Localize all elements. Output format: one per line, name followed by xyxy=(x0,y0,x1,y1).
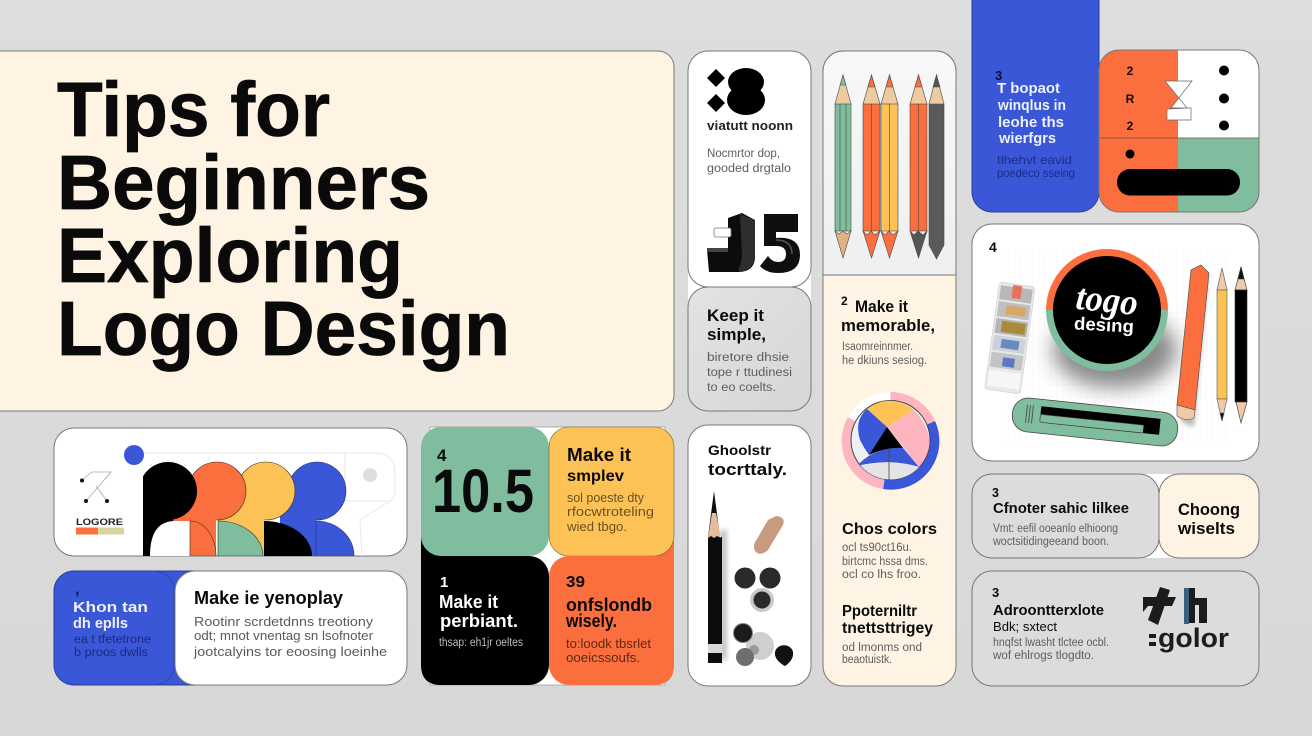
tile: yellow tip: Make it xyxy=(567,445,631,465)
body text xyxy=(842,542,928,581)
blue tip body: ea t tfetetrone xyxy=(74,634,151,646)
panel: four colour tiles xyxy=(421,427,674,685)
blue tip body xyxy=(74,634,151,659)
heading: Bdk; sxtect xyxy=(993,619,1057,634)
caption: viatutt noonn xyxy=(707,118,793,133)
orange pencil two xyxy=(910,75,927,258)
tile: green number: 4 xyxy=(437,446,447,465)
cream tip card xyxy=(1159,474,1259,558)
heading: make it memorable: memorable, xyxy=(841,317,935,335)
blue tip heading xyxy=(73,600,148,632)
panel: paired tip row xyxy=(972,474,1259,558)
heading: strategy: Ppoterniltr xyxy=(842,603,917,620)
body text: he dkiuns sesiog. xyxy=(842,355,927,367)
circular logo badge: togo xyxy=(1074,277,1140,324)
circular logo badge xyxy=(1046,249,1168,371)
panel: keep it simple xyxy=(688,287,811,411)
panel: pencils and make it memorable xyxy=(823,51,956,686)
heading: Adroontterxlote xyxy=(993,603,1104,619)
title: Tips for xyxy=(57,67,330,153)
heading: make it memorable: 2 xyxy=(841,294,848,308)
numbers column: R xyxy=(1126,92,1135,106)
blue tip heading: dh eplls xyxy=(73,616,128,632)
body text xyxy=(992,637,1109,662)
body text xyxy=(193,614,387,659)
numbers column: 2 xyxy=(1127,119,1134,133)
black pill xyxy=(1117,169,1240,196)
heading: strategy xyxy=(842,603,933,637)
panel: blue tip xyxy=(54,571,214,685)
body text: tlhehvt eavid xyxy=(997,153,1072,167)
body text: birtcmc hssa dms. xyxy=(842,556,928,568)
body text: biretore dhsie xyxy=(707,352,789,364)
panel: blue top card: 3 xyxy=(995,68,1002,83)
numbers column: 2 xyxy=(1127,64,1134,78)
icon: black and silver buttons xyxy=(734,568,793,666)
green pencil xyxy=(835,75,851,258)
heading: Keep it xyxy=(707,307,765,325)
body text: ocl co lhs froo. xyxy=(842,569,921,581)
colour wheel chart xyxy=(842,392,939,490)
heading: Ghoolstr xyxy=(708,442,772,458)
yellow pencil xyxy=(1217,268,1227,421)
panel: blue top card xyxy=(972,0,1099,212)
panel: tools card xyxy=(688,425,811,686)
heading: choose colors: Chos colors xyxy=(842,521,937,538)
heading: simple, xyxy=(707,326,766,344)
tile: black tip: thsap: eh1jr oeltes xyxy=(439,637,523,649)
title: Logo Design xyxy=(57,286,510,372)
body text: odt; mnot vnentag sn lsofnoter xyxy=(194,628,374,643)
icon: hourglass xyxy=(1165,81,1192,120)
tile: orange tip: wisely. xyxy=(565,611,617,631)
title: Exploring xyxy=(57,213,403,299)
body text: Nocmrtor dop, xyxy=(707,148,780,160)
blue tip heading: Khon tan xyxy=(73,600,148,616)
body text xyxy=(707,352,792,394)
grey tip card: woctsitidingeeand boon. xyxy=(992,536,1109,548)
tile: orange tip: ooeicssoufs. xyxy=(566,651,640,665)
blue tip body: b proos dwlls xyxy=(74,647,148,659)
circular logo badge: desing xyxy=(1074,313,1134,337)
heading: make it memorable: Make it xyxy=(855,298,908,316)
icon: pencils xyxy=(835,75,944,259)
heading: tocrttaly. xyxy=(708,460,787,479)
grey tip card: 3 xyxy=(992,486,999,500)
tile: black tip xyxy=(421,556,549,685)
body text xyxy=(842,341,927,367)
panel: blue tip: , xyxy=(75,581,79,598)
panel: colour logo tip xyxy=(972,571,1259,686)
tile: orange tip: onfslondb xyxy=(566,595,652,615)
tile: yellow tip xyxy=(549,427,674,556)
panel: logo design illustration xyxy=(972,224,1259,461)
heading xyxy=(708,442,787,479)
logo mark: golor xyxy=(1143,587,1230,653)
black pencil xyxy=(1235,267,1247,423)
cream tip card: wiselts xyxy=(1177,519,1235,538)
body text xyxy=(707,148,791,175)
body text: Rootinr scrdetdnns treotiony xyxy=(194,614,374,629)
body text xyxy=(842,642,922,666)
body text xyxy=(997,153,1075,180)
tile: yellow tip: sol poeste dty xyxy=(567,491,645,505)
body text: beaotuistk. xyxy=(842,654,892,666)
yellow pencil xyxy=(881,75,898,258)
icon: blue dot xyxy=(124,445,144,465)
body text: poedeco sseing xyxy=(997,166,1075,180)
heading: wierfgrs xyxy=(998,131,1056,147)
small logo label xyxy=(76,517,124,534)
panel: colour block tile xyxy=(1099,50,1259,212)
title xyxy=(57,67,510,372)
logo mark: golor: golor xyxy=(1158,623,1230,653)
tile: yellow tip: smplev xyxy=(567,468,624,485)
title: Beginners xyxy=(57,140,430,226)
heading: leohe ths xyxy=(998,115,1064,131)
heading: T bopaot xyxy=(997,81,1060,97)
icon: 3D numerals xyxy=(707,213,800,273)
icon: diamonds and blob mark xyxy=(707,68,765,115)
body text: gooded drgtalo xyxy=(707,163,791,175)
heading xyxy=(993,603,1104,634)
icon: node diagram xyxy=(80,472,111,503)
circle shadow xyxy=(1053,312,1177,388)
photo strip xyxy=(985,282,1035,394)
orange pencil xyxy=(1177,265,1209,427)
orange pencil one xyxy=(863,75,880,258)
numbers column xyxy=(1126,64,1135,133)
tile: orange tip: 39 xyxy=(566,574,585,591)
body text: wof ehlrogs tlogdto. xyxy=(992,650,1094,662)
tile: orange tip xyxy=(549,556,674,685)
grey pencil xyxy=(929,75,944,259)
tile: yellow tip: rfocwtroteling xyxy=(567,505,654,519)
grey tip card: Cfnoter sahic lilkee xyxy=(993,501,1129,517)
body text: ocl ts90ct16u. xyxy=(842,542,912,554)
dots xyxy=(1126,66,1229,158)
tile: green number xyxy=(421,427,549,556)
green pill tool xyxy=(1011,396,1179,448)
panel: title xyxy=(0,51,674,411)
geometric logo artwork xyxy=(120,453,395,556)
heading: strategy: tnettsttrigey xyxy=(842,620,933,637)
grey tip card xyxy=(972,474,1159,558)
cream tip card: Choong xyxy=(1178,500,1240,519)
body text: tope r ttudinesi xyxy=(707,367,792,379)
heading: winqlus in xyxy=(997,98,1066,114)
tile: green number: 10.5 xyxy=(432,457,534,525)
body text: jootcalyins tor eoosing loeinhe xyxy=(193,644,387,659)
icon: black pencil xyxy=(708,491,727,663)
icon: eraser xyxy=(754,516,784,554)
body text: hnqfst lwasht tlctee ocbl. xyxy=(993,637,1109,649)
heading: make it memorable xyxy=(841,294,935,335)
tile: black tip: perbiant. xyxy=(440,611,518,631)
tile: orange tip: to:loodk tbsrlet xyxy=(566,637,652,651)
panel: logo design illustration: 4 xyxy=(989,239,997,255)
panel: logo mark and 3D numerals xyxy=(688,51,811,320)
body text: to eo coelts. xyxy=(707,382,776,394)
panel: colour logo tip: 3 xyxy=(992,585,999,600)
body text: Isaomreinnmer. xyxy=(842,341,913,353)
tile: yellow tip: wied tbgo. xyxy=(566,520,627,534)
panel: make it enjoyable xyxy=(175,571,407,685)
grey tip card: Vmt: eefil ooeanlo elhioong xyxy=(993,523,1118,535)
heading: Make ie yenoplay xyxy=(194,588,343,608)
heading xyxy=(707,307,766,344)
tile: black tip: Make it xyxy=(439,592,498,612)
tile: black tip: 1 xyxy=(440,574,448,591)
panel: abstract logo shapes xyxy=(54,428,407,556)
small logo label: LOGORE xyxy=(76,517,123,528)
heading xyxy=(997,81,1066,147)
body text: od lmonms ond xyxy=(842,642,922,654)
